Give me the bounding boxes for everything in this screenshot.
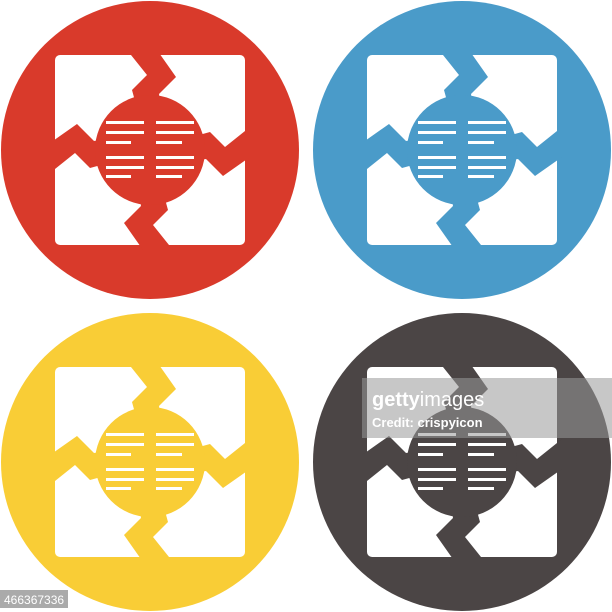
- icon: blue: [313, 1, 611, 299]
- image id label: [0, 590, 68, 608]
- icon: red: [1, 1, 299, 299]
- image id label: 466367336: [4, 593, 64, 607]
- watermark: gettyimages: [372, 389, 484, 411]
- icon: dark: [313, 313, 611, 611]
- watermark: [362, 378, 612, 438]
- watermark: Credit: crispyicon: [372, 415, 483, 430]
- icon: yellow: [1, 313, 299, 611]
